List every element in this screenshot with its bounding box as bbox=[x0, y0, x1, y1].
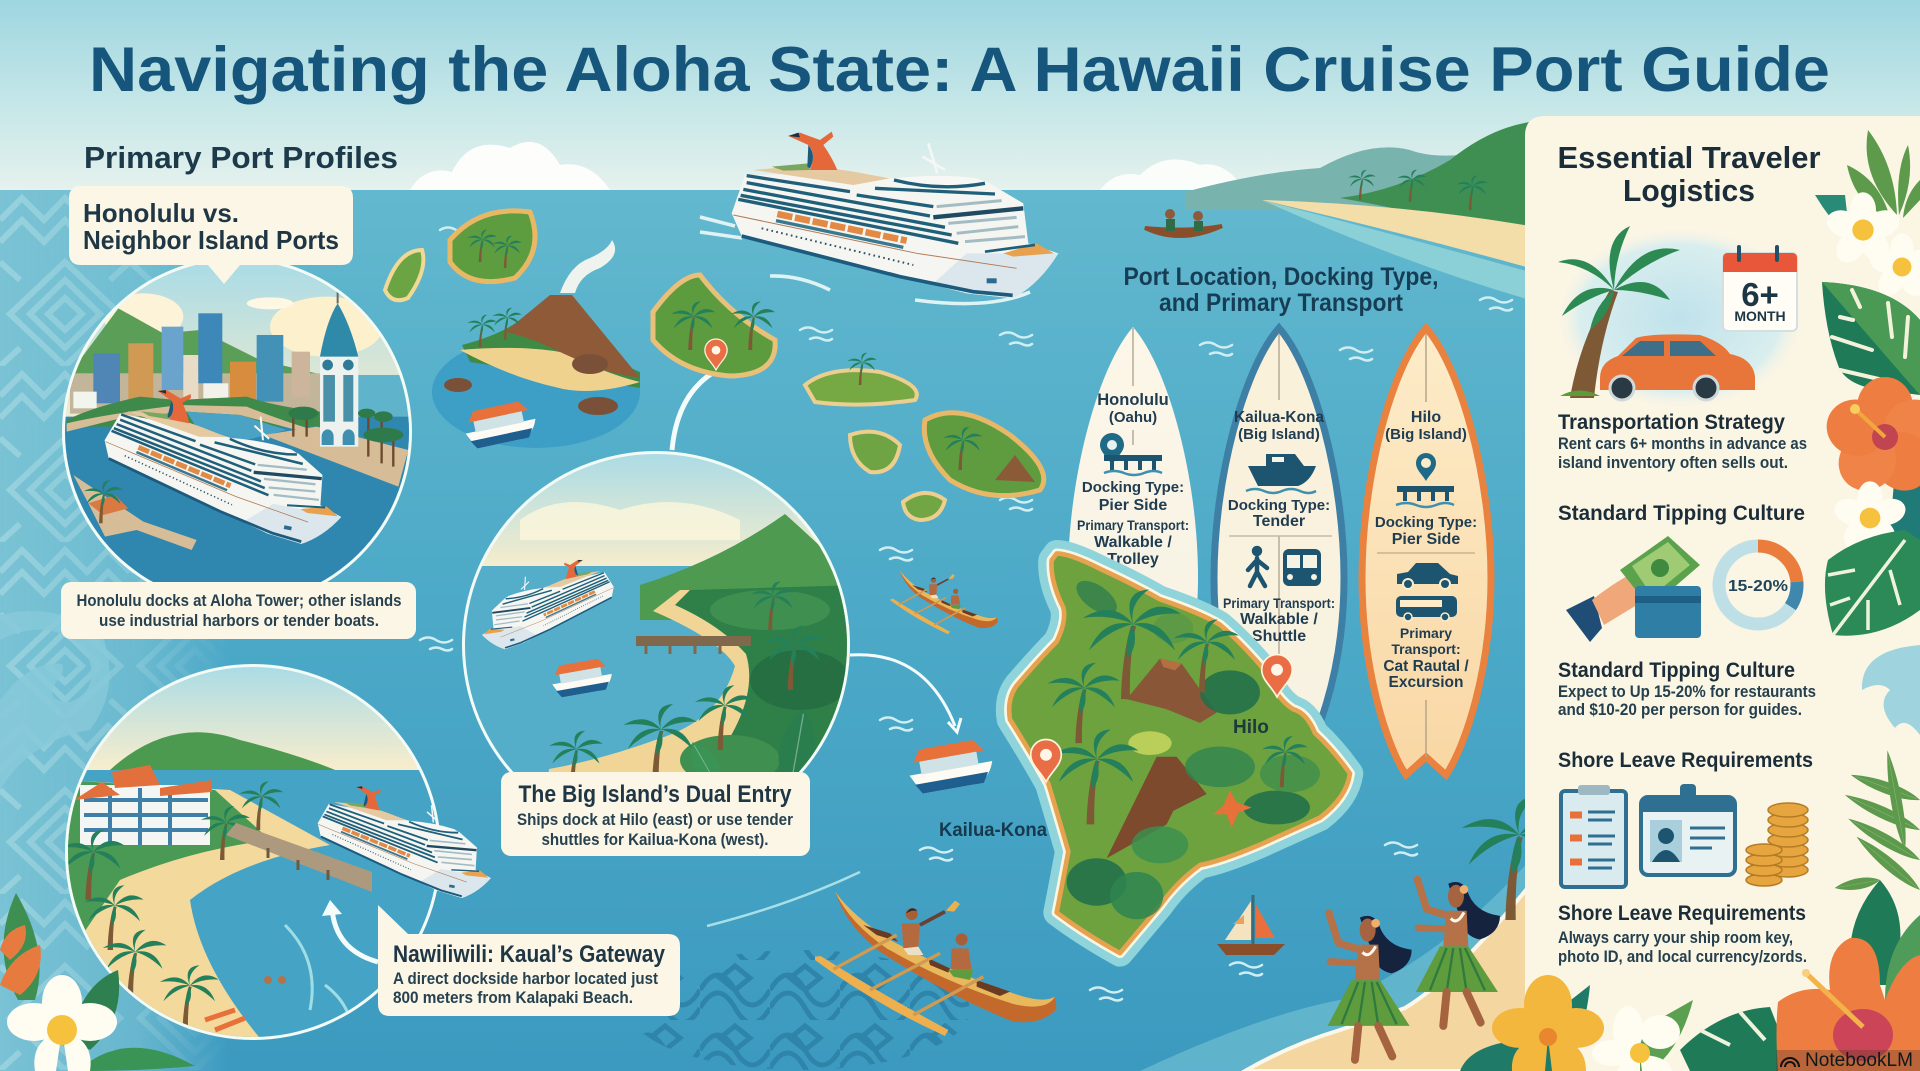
text block: Shore Leave Requirements bbox=[1558, 902, 1807, 966]
surfboard: Hilo bbox=[1362, 328, 1491, 775]
caption: The Big Island's Dual Entry bbox=[501, 772, 810, 856]
surfboard: Honolulu: (Oahu) bbox=[1109, 409, 1157, 426]
caption: The Big Island's Dual Entry: The Big Island’s Dual Entry bbox=[518, 781, 792, 808]
text block: Standard Tipping Culture: Standard Tipping Culture bbox=[1558, 659, 1795, 682]
surfboard: Hilo: (Big Island) bbox=[1385, 426, 1467, 443]
surfboard: Hilo: Cat Rautal / bbox=[1383, 658, 1469, 675]
text block: Shore Leave Requirements: Always carry your ship room key, bbox=[1558, 929, 1793, 947]
surfboard: Kailua-Kona: Docking Type: bbox=[1228, 497, 1330, 514]
wave swirl bbox=[0, 611, 110, 790]
sailboat bbox=[1217, 895, 1285, 955]
panel: Essential Traveler Logistics bbox=[1525, 116, 1920, 1071]
surfboard: Honolulu: Walkable / bbox=[1094, 534, 1172, 551]
text block: Transportation Strategy: island inventory often sells out. bbox=[1558, 454, 1788, 472]
title: Navigating the Aloha State: A Hawaii Cruise Port Guide bbox=[89, 35, 1830, 105]
subheading: Standard Tipping Culture: Standard Tipping Culture bbox=[1558, 502, 1805, 525]
circle: Big Island dual entry bbox=[462, 451, 850, 772]
icon: calendar bbox=[1723, 247, 1797, 331]
tribal pattern, left edge bbox=[0, 190, 230, 1071]
large canoe bbox=[815, 892, 1057, 1036]
icon: photo ID bbox=[1641, 784, 1735, 875]
text block: Standard Tipping Culture: and $10-20 per person for guides. bbox=[1558, 701, 1802, 719]
caption: Nawiliwili: A direct dockside harbor located just bbox=[393, 970, 658, 988]
foliage and flowers: bottom border bbox=[1460, 938, 1920, 1071]
bottom tribal pattern bbox=[630, 950, 970, 1070]
text block: Transportation Strategy: Transportation Strategy bbox=[1558, 411, 1785, 434]
surfboard: Kailua-Kona: Shuttle bbox=[1252, 628, 1306, 645]
surfboard: Hilo: Primary bbox=[1400, 625, 1452, 641]
pin: Hilo bbox=[1262, 654, 1292, 697]
NotebookLM badge: NotebookLM bbox=[1805, 1050, 1913, 1071]
ship at sea bbox=[700, 132, 1058, 304]
icon: pin and pier bbox=[1396, 453, 1454, 507]
surfboard: Hilo: Docking Type: bbox=[1375, 514, 1477, 531]
panel heading: Essential Traveler bbox=[1558, 140, 1820, 175]
hula dancers bbox=[1328, 879, 1500, 1060]
small islands bbox=[385, 211, 1044, 520]
arrow: Nawiliwili to harbor bbox=[322, 900, 378, 962]
label: Kailua-Kona: Kailua-Kona bbox=[939, 820, 1047, 841]
callout: Honolulu vs Neighbor Island Ports: Neighbor Island Ports bbox=[83, 225, 339, 255]
Big Island map bbox=[1009, 554, 1350, 953]
beach, bottom right bbox=[1245, 885, 1530, 1071]
callout: Honolulu vs Neighbor Island Ports bbox=[69, 186, 353, 284]
chart: 15-20% donut bbox=[1719, 546, 1797, 624]
text block: Standard Tipping Culture bbox=[1558, 659, 1816, 719]
illustration: palm, rental car and calendar bbox=[1555, 226, 1805, 410]
heading: Port Location, Docking Type, and Primary Transport: Port Location, Docking Type, bbox=[1124, 263, 1438, 291]
surfboard: Hilo: Hilo bbox=[1411, 409, 1441, 426]
caption: The Big Island's Dual Entry: Ships dock at Hilo (east) or use tender bbox=[517, 811, 794, 829]
line across tribal pattern bbox=[707, 872, 860, 926]
foliage: right border bbox=[1815, 130, 1920, 1000]
volcano island scene bbox=[432, 240, 640, 450]
flowers, bottom left bbox=[0, 893, 195, 1071]
palm on beach bbox=[1462, 796, 1574, 920]
caption: Honolulu: use industrial harbors or tender boats. bbox=[99, 612, 379, 630]
surfboard: Kailua-Kona: Kailua-Kona bbox=[1234, 409, 1324, 426]
chart: 15-20% donut: 15-20% bbox=[1728, 578, 1788, 595]
surfboard: Kailua-Kona: Walkable / bbox=[1240, 611, 1318, 628]
surfboard: Hilo: Transport: bbox=[1391, 641, 1461, 657]
surfboard: Kailua-Kona: (Big Island) bbox=[1238, 426, 1320, 443]
arrow: dual entry to tender bbox=[850, 655, 961, 732]
surfboard: Honolulu: Honolulu bbox=[1097, 391, 1169, 409]
surfboard: Kailua-Kona bbox=[1214, 328, 1344, 798]
sky background bbox=[0, 0, 1920, 192]
surfboard: Kailua-Kona: Primary Transport: bbox=[1223, 595, 1335, 611]
text block: Transportation Strategy bbox=[1558, 411, 1807, 472]
icon: walker bbox=[1248, 548, 1267, 586]
surfboard: Honolulu bbox=[1068, 327, 1198, 797]
caption: Nawiliwili: Nawiliwili: Kaual’s Gateway bbox=[393, 941, 666, 968]
icon: coin stack bbox=[1746, 803, 1808, 886]
text block: Transportation Strategy: Rent cars 6+ months in advance as bbox=[1558, 435, 1807, 453]
wave ticks bbox=[420, 228, 1512, 1000]
surfboard: Honolulu: Primary Transport: bbox=[1077, 517, 1189, 533]
canoe with two paddlers, mid sea bbox=[891, 570, 998, 634]
caption: Nawiliwili: 800 meters from Kalapaki Beach. bbox=[393, 989, 633, 1007]
subheading: Shore Leave Requirements: Shore Leave Requirements bbox=[1558, 749, 1813, 772]
surfboard: Honolulu: Pier Side bbox=[1099, 497, 1167, 514]
text block: Shore Leave Requirements: Shore Leave Requirements bbox=[1558, 902, 1806, 925]
coast: distant mountains, hill and beach bbox=[1185, 122, 1530, 300]
icon: car bbox=[1397, 563, 1458, 589]
icon: calendar: 6+ bbox=[1741, 276, 1779, 313]
surfboard: Kailua-Kona: Tender bbox=[1253, 513, 1305, 530]
panel heading: Logistics bbox=[1623, 173, 1755, 208]
icon: tender boat bbox=[1246, 454, 1316, 493]
panel heading bbox=[1558, 140, 1820, 208]
callout: Honolulu vs Neighbor Island Ports: Honolulu vs. bbox=[83, 198, 239, 228]
caption: Nawiliwili bbox=[378, 905, 680, 1016]
pin: Kailua-Kona bbox=[1031, 740, 1061, 782]
icon: calendar: MONTH bbox=[1734, 308, 1786, 324]
surfboard: Honolulu: Trolley bbox=[1107, 551, 1159, 568]
circle: Honolulu harbor bbox=[62, 265, 412, 582]
surfboard: Hilo: Pier Side bbox=[1392, 531, 1460, 548]
small canoe near coast bbox=[1145, 209, 1222, 236]
surfboard: Hilo: Excursion bbox=[1389, 674, 1463, 691]
icon: bus bbox=[1396, 596, 1457, 621]
label: Hilo: Hilo bbox=[1233, 717, 1269, 738]
circle: Nawiliwili harbor bbox=[61, 664, 503, 1050]
island: Oahu with pin and connector bbox=[653, 275, 775, 450]
surfboard: Honolulu: Docking Type: bbox=[1082, 479, 1184, 496]
clouds bbox=[410, 142, 1245, 190]
icon: car bbox=[1600, 334, 1755, 400]
heading: Port Location, Docking Type, and Primary Transport bbox=[1124, 263, 1438, 317]
shallow water by the beach bbox=[1140, 860, 1530, 1071]
icon: checklist clipboard bbox=[1561, 785, 1626, 887]
caption: Honolulu bbox=[61, 582, 416, 639]
heading: Port Location, Docking Type, and Primary Transport: and Primary Transport bbox=[1159, 289, 1404, 317]
icon: bus bbox=[1283, 549, 1321, 586]
caption: The Big Island's Dual Entry: shuttles for Kailua-Kona (west). bbox=[542, 831, 768, 849]
text block: Standard Tipping Culture: Expect to Up 15-20% for restaurants bbox=[1558, 683, 1816, 701]
icon: pin and pier bbox=[1100, 433, 1162, 475]
text block: Shore Leave Requirements: photo ID, and local currency/zords. bbox=[1558, 948, 1807, 966]
caption: Honolulu: Honolulu docks at Aloha Tower; other islands bbox=[76, 592, 402, 610]
heading: Primary Port Profiles: Primary Port Profiles bbox=[84, 140, 398, 175]
tender boat bbox=[905, 737, 996, 795]
icon: hand, cash and card bbox=[1566, 536, 1701, 642]
